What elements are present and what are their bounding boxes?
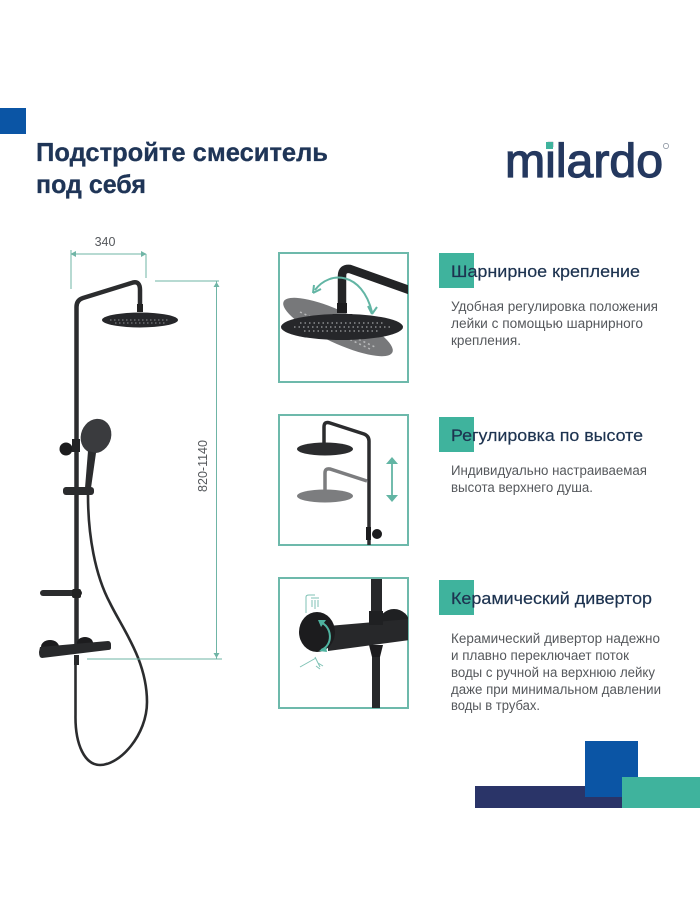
text: diverter: Керамический дивертор надежно: [451, 631, 660, 646]
arm and stem: [338, 264, 408, 303]
text: swivel joint: [451, 299, 658, 348]
corner accent square: [0, 108, 26, 134]
icon: overhead shower: [306, 595, 319, 613]
panel: swivel joint image: [277, 253, 412, 382]
panel: diverter image: [279, 578, 410, 708]
title: Подстройте смеситель: [36, 137, 328, 167]
hose: [75, 495, 147, 765]
dimension: 820-1140 height: [87, 281, 222, 659]
slider holder: [63, 487, 94, 495]
shower system illustration: [39, 282, 178, 765]
text: swivel joint: крепления.: [451, 333, 521, 348]
heading: swivel joint: Шарнирное крепление: [451, 262, 640, 281]
soap dish: [40, 589, 82, 598]
front shower head: [281, 314, 403, 340]
text: diverter: воды с ручной на верхнюю лейку: [451, 665, 655, 680]
text: diverter: даже при минимальном давлении: [451, 682, 661, 697]
logo: milardo: milardo: [505, 134, 663, 187]
rear knob: [383, 609, 408, 622]
icon: hand shower: [300, 657, 323, 669]
rotation arrow: [313, 278, 377, 314]
wall bracket knob: [60, 439, 80, 456]
text: diverter: [451, 631, 661, 713]
mixer body: [328, 622, 408, 651]
knob: [366, 527, 382, 540]
title: [36, 137, 328, 199]
heading: height adjustment: [439, 417, 643, 452]
tilted grey shower head: [283, 298, 393, 356]
pipes: [371, 579, 382, 611]
panel: height adjustment image: [279, 415, 408, 545]
text: diverter: и плавно переключает поток: [451, 648, 629, 663]
dimension: 820-1140 height: 820-1140: [196, 440, 210, 492]
rotation arrow: [318, 620, 330, 652]
heading: diverter: Керамический дивертор: [451, 589, 652, 608]
dimension: 340 width: [70, 235, 146, 289]
grey lowered shower: [297, 469, 367, 502]
thermostat mixer: [39, 637, 111, 665]
heading: height adjustment: Регулировка по высоте: [451, 426, 643, 445]
bottom corner colour blocks: [475, 741, 700, 808]
front knob: [299, 612, 335, 652]
heading: diverter: [439, 580, 652, 615]
double arrow: [386, 457, 398, 502]
riser pipe and arm: [76, 282, 140, 650]
title: под себя: [36, 169, 146, 199]
dimension: 340 width: 340: [95, 235, 115, 249]
text: swivel joint: Удобная регулировка положения: [451, 299, 658, 314]
text: diverter: воды в трубах.: [451, 698, 540, 713]
raised shower and pipe: [297, 422, 369, 545]
heading: swivel joint: [439, 253, 640, 288]
text: height adjustment: [451, 463, 647, 495]
text: height adjustment: Индивидуально настраиваемая: [451, 463, 647, 478]
rain shower head: [102, 312, 178, 328]
hand shower: [76, 414, 116, 488]
text: swivel joint: лейки с помощью шарнирного: [451, 316, 643, 331]
text: height adjustment: высота верхнего душа.: [451, 480, 593, 495]
